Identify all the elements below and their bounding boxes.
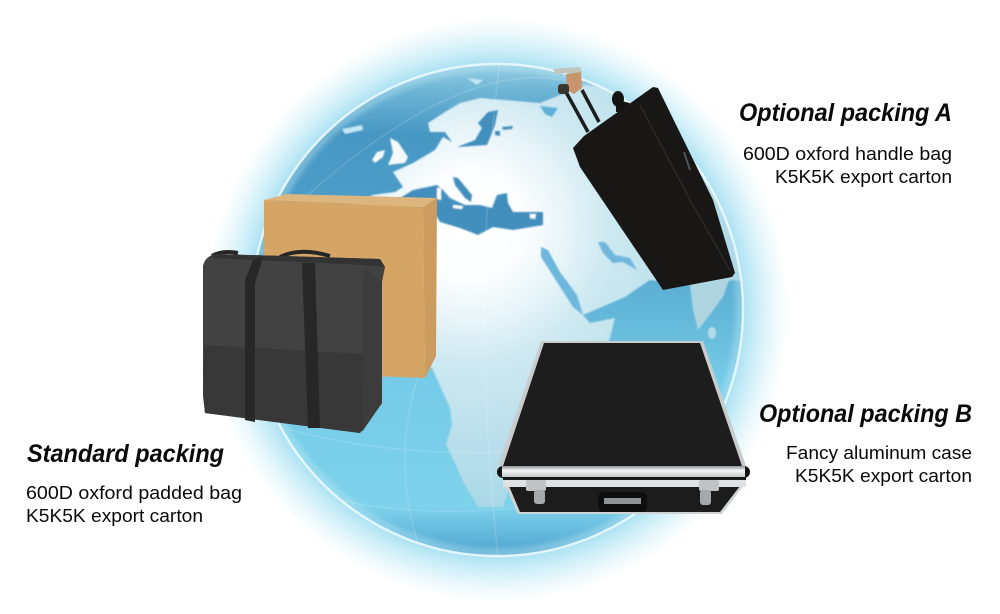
text: optional packing B <box>759 400 972 486</box>
right latch <box>699 480 719 505</box>
British Isles <box>388 138 408 165</box>
graticule <box>290 66 560 555</box>
Red Sea <box>541 247 583 315</box>
product: carton box <box>264 194 437 378</box>
Persian Gulf <box>598 242 637 270</box>
bag straps <box>245 257 320 428</box>
text: standard packing <box>26 440 242 526</box>
side handle <box>612 91 630 112</box>
left latch <box>526 480 546 504</box>
text: optional packing B: K5K5K export carton <box>795 466 972 486</box>
text: optional packing A: K5K5K export carton <box>775 167 952 187</box>
Caspian <box>540 106 558 117</box>
product: trolley bag with hand <box>553 67 735 290</box>
text: optional packing B: Fancy aluminum case <box>786 443 972 463</box>
text: standard packing: Standard packing <box>27 440 224 468</box>
globe rim <box>251 64 743 556</box>
globe halo <box>205 18 789 602</box>
text: standard packing: 600D oxford padded bag <box>26 483 242 503</box>
text: optional packing A: Optional packing A <box>739 99 952 127</box>
product: padded bag <box>203 252 385 433</box>
telescopic handle <box>566 90 599 132</box>
Mediterranean <box>400 185 543 235</box>
product: aluminum case <box>497 341 750 514</box>
Iceland and Greenland tip <box>342 125 363 134</box>
text: optional packing B: Optional packing B <box>759 400 972 428</box>
land masses <box>342 78 740 508</box>
text: optional packing A: 600D oxford handle bag <box>743 144 952 164</box>
text: optional packing A <box>739 99 952 187</box>
hand <box>553 67 582 94</box>
bag handles <box>212 252 330 257</box>
case handle <box>598 492 647 512</box>
text: standard packing: K5K5K export carton <box>26 506 203 526</box>
India <box>690 278 730 330</box>
globe <box>251 60 760 556</box>
Adriatic <box>453 177 472 202</box>
case rail <box>497 466 750 478</box>
seas <box>400 106 637 315</box>
Baltic <box>457 110 498 147</box>
